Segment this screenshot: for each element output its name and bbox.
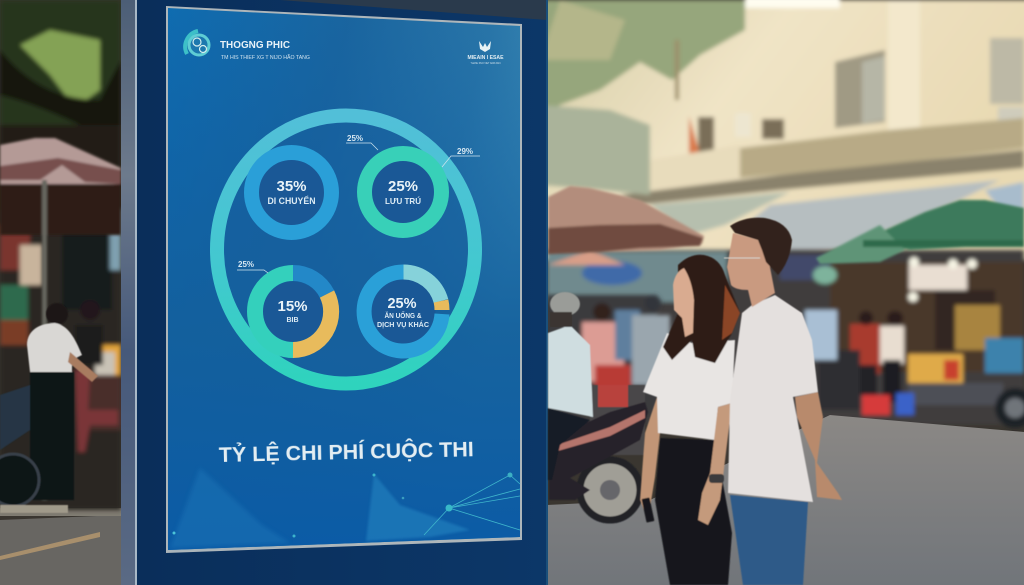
callout 25% top: 25%: [347, 134, 363, 143]
left scene: [0, 0, 121, 510]
segment yellow: [293, 294, 331, 350]
donut: ăn uống và dịch vụ khác 25%: [364, 272, 442, 351]
brand logo left: [185, 31, 310, 61]
couple: [640, 218, 842, 585]
segment light: [404, 272, 441, 301]
left umbrella: [0, 138, 121, 500]
man face: [727, 233, 775, 307]
woman shirt: [643, 333, 735, 440]
green umbrella: [816, 200, 1024, 264]
icon: swirl logo: [185, 31, 209, 55]
woman left arm: [640, 397, 660, 520]
segment yellow: [441, 301, 442, 310]
screen bezel: [166, 6, 522, 553]
screen: [168, 8, 520, 550]
green tree: [540, 0, 745, 120]
big ring chart: [217, 116, 475, 384]
donut: bib 15%: [255, 273, 331, 350]
road left: [0, 515, 121, 585]
woman right arm: [698, 403, 732, 525]
icon: leaf emblem: [479, 41, 491, 52]
bike body: [549, 402, 648, 500]
watch: [709, 474, 724, 483]
segment blue: [293, 273, 327, 294]
right side stall: [547, 250, 1024, 428]
partner name: MIEAIN I ESAE: [468, 55, 504, 61]
label: LƯU TRÚ: [385, 195, 421, 206]
callout 25% left: [237, 260, 268, 273]
right side buildings: [540, 0, 1024, 260]
kiosk side panel: [121, 0, 136, 585]
callout 29% right: 29%: [457, 147, 473, 156]
network decoration: [170, 468, 520, 548]
donut: di chuyển 35%: [252, 152, 332, 232]
motorbike rider: [548, 292, 648, 520]
wheel: [580, 460, 640, 520]
left man: [0, 303, 98, 513]
road right: [547, 415, 1024, 585]
man arm: [795, 392, 842, 500]
label: DI CHUYỂN: [268, 195, 316, 206]
segment blue: [364, 272, 442, 351]
callout 25% top: [346, 134, 378, 150]
value: 25%: [388, 178, 418, 195]
kiosk display frame: [121, 0, 548, 585]
bike rear clutter: [590, 385, 645, 455]
partner logo right: [468, 41, 504, 65]
legs: [548, 408, 590, 480]
value: 35%: [276, 178, 307, 195]
helmet: [550, 292, 580, 316]
man jeans: [730, 495, 808, 585]
man: [724, 218, 842, 585]
partner tagline: THANH PHO VIET NAM 2024: [470, 61, 501, 65]
brand subtitle: TM HIS THIEF XG T NIJO HÃO TANG: [221, 54, 310, 61]
callout 29% right: [442, 147, 480, 167]
woman hair: [663, 255, 740, 363]
phone: [642, 497, 654, 523]
shirt: [548, 325, 593, 417]
segment teal: [255, 273, 293, 350]
value: 15%: [277, 298, 308, 315]
title: TỶ LỆ CHI PHÍ CUỘC THI: [219, 437, 474, 467]
woman: [640, 255, 740, 585]
brown umbrella right: [548, 186, 704, 254]
woman face: [673, 268, 694, 337]
woman trousers: [655, 438, 732, 585]
man shirt: [728, 295, 818, 502]
label line 2: DỊCH VỤ KHÁC: [377, 320, 430, 329]
brand name: THOGNG PHIC: [220, 40, 290, 51]
crowd: [547, 295, 670, 415]
label line 1: ĂN UỐNG &: [384, 310, 422, 320]
callout 25% left: 25%: [238, 260, 254, 269]
label: BIB: [286, 317, 299, 324]
donut: lưu trú 25%: [364, 154, 442, 230]
glasses: [724, 257, 760, 259]
value: 25%: [387, 296, 417, 312]
man hair: [730, 218, 792, 275]
